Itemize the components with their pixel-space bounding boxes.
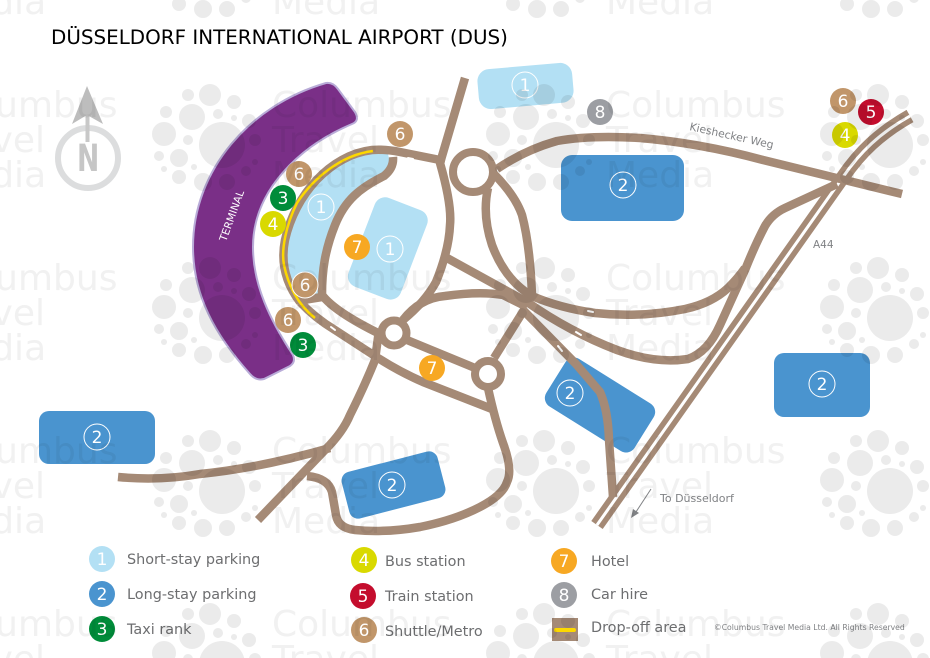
panel: short-stay parking north [476,62,575,110]
marker: hotel south [419,355,445,381]
legend: train station: 5 [358,587,368,607]
legend: train station: Train station [384,589,474,605]
marker: short-stay terminal [308,194,334,220]
roundabout north [453,152,493,192]
legend: shuttle/metro: Shuttle/Metro [385,624,483,640]
marker: shuttle terminal upper: 6 [294,165,304,185]
arrow: to Düsseldorf [631,489,735,518]
legend: long-stay parking: Long-stay parking [127,587,257,603]
marker: taxi terminal lower: 3 [298,336,308,356]
icon: north compass: N [77,137,99,180]
panel: short-stay parking centre [345,194,431,303]
terminal building [193,83,357,379]
arrow: to Düsseldorf: To Düsseldorf [659,492,735,505]
legend: bus station: Bus station [385,554,466,570]
legend: taxi rank: 3 [97,620,107,640]
marker: shuttle terminal upper [286,161,312,187]
legend: bus station [351,547,466,573]
terminal building: TERMINAL [217,189,247,244]
marker: shuttle north of terminal road [387,121,413,147]
marker: long-stay west [84,424,110,450]
marker: short-stay north [512,72,538,98]
marker: shuttle in parking [292,272,318,298]
legend: long-stay parking: 2 [97,585,107,605]
marker: shuttle east: 6 [838,92,848,112]
marker: hotel south: 7 [427,359,437,379]
marker: bus east [832,122,858,148]
marker: long-stay north [610,172,636,198]
panel: long-stay parking south [340,449,447,521]
marker: long-stay south [379,472,405,498]
legend [89,546,686,643]
panel: long-stay parking north [561,155,684,221]
legend: drop-off area: Drop-off area [591,620,686,636]
legend: taxi rank: Taxi rank [126,622,192,638]
marker: short-stay centre: 1 [385,240,395,260]
legend: hotel: Hotel [591,554,629,570]
marker: train station: 5 [866,103,876,123]
title: DÜSSELDORF INTERNATIONAL AIRPORT (DUS) [51,26,508,49]
location markers [84,72,884,498]
marker: hotel centre: 7 [352,238,362,258]
marker: long-stay south-east [557,380,583,406]
legend: shuttle/metro [351,617,483,643]
marker: short-stay north: 1 [520,76,530,96]
marker: shuttle east [830,88,856,114]
label: A44: A44 [813,239,834,251]
roundabout south [475,361,501,387]
legend: taxi rank [89,616,192,642]
marker: taxi terminal lower [290,332,316,358]
marker: car hire [587,99,613,125]
legend: shuttle/metro: 6 [359,621,369,641]
legend: hotel: 7 [559,552,569,572]
marker: car hire: 8 [595,103,605,123]
marker: shuttle terminal lower [275,307,301,333]
drop-off area line [283,151,373,318]
legend: drop-off area [552,618,686,641]
motorway A44 [597,116,910,525]
marker: bus terminal [260,211,286,237]
panel: short-stay parking beside terminal [284,152,391,297]
legend: short-stay parking [89,546,260,572]
legend: long-stay parking [89,581,257,607]
icon: north compass [58,86,118,188]
copyright: ©Columbus Travel Media Ltd. All Rights Reserved [714,623,905,632]
marker: long-stay east [809,371,835,397]
legend: car hire: Car hire [591,587,648,603]
marker: train station [858,99,884,125]
legend: hotel [551,548,629,574]
marker: short-stay centre [377,236,403,262]
marker: long-stay south-east: 2 [565,384,575,404]
marker: taxi terminal upper [270,185,296,211]
legend: short-stay parking: 1 [97,550,107,570]
marker: shuttle in parking: 6 [300,276,310,296]
marker: bus east: 4 [840,126,850,146]
marker: long-stay north: 2 [618,176,628,196]
legend: car hire: 8 [559,586,569,606]
panel: long-stay parking south-east [541,354,659,456]
marker: long-stay east: 2 [817,375,827,395]
marker: shuttle north of terminal road: 6 [395,125,405,145]
legend: car hire [551,582,648,608]
one-way road arrows [331,158,593,351]
legend: train station [350,583,474,609]
legend: bus station: 4 [359,551,369,571]
marker: taxi terminal upper: 3 [278,189,288,209]
legend: short-stay parking: Short-stay parking [127,552,260,568]
label: Kieshecker Weg: Kieshecker Weg [688,120,775,151]
roundabout west [382,320,406,346]
road network [118,78,902,531]
panel: long-stay parking east [774,353,870,417]
marker: long-stay west: 2 [92,428,102,448]
panel: long-stay parking west [39,411,155,464]
marker: long-stay south: 2 [387,476,397,496]
marker: shuttle terminal lower: 6 [283,311,293,331]
marker: short-stay terminal: 1 [316,198,326,218]
marker: hotel centre [344,234,370,260]
marker: bus terminal: 4 [268,215,278,235]
